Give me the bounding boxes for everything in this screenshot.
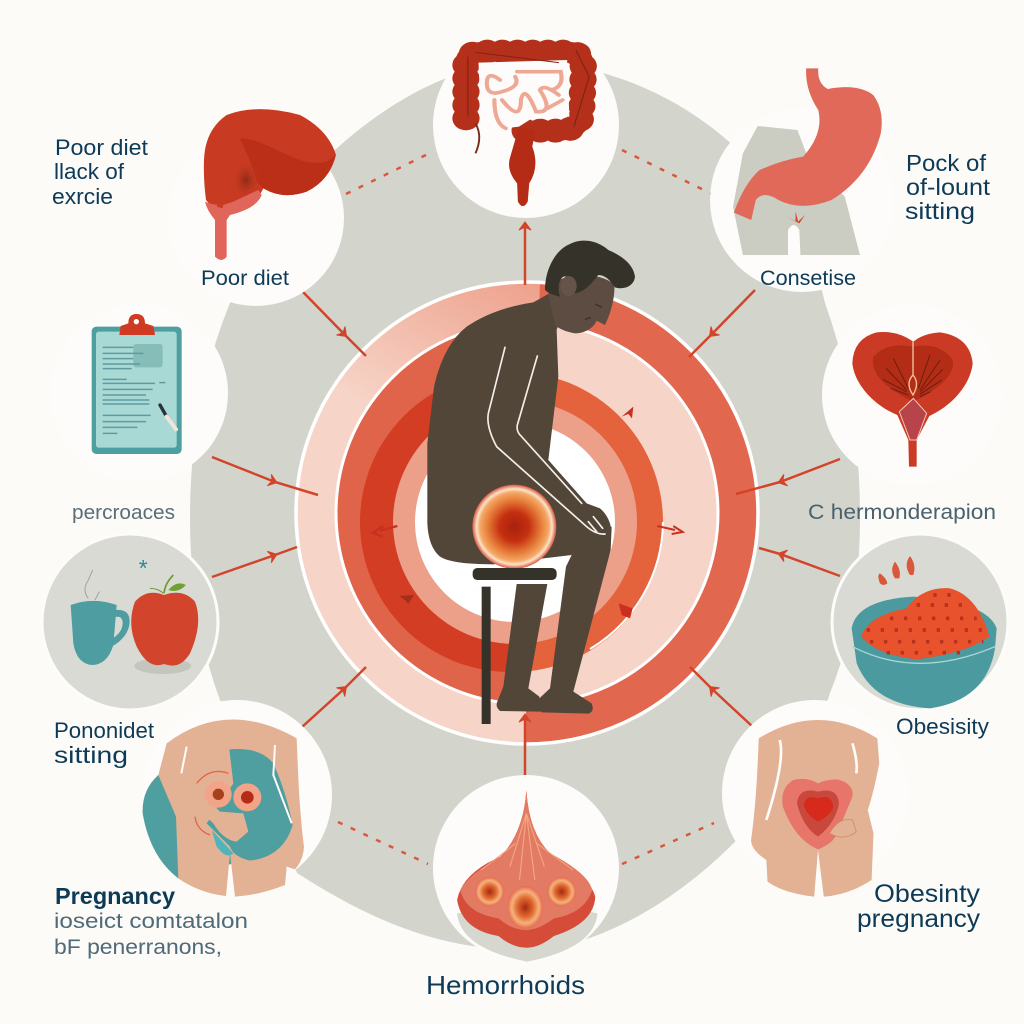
concentric rings xyxy=(296,282,758,744)
arrow: lower right xyxy=(759,548,840,576)
pain arrow xyxy=(622,407,633,418)
text: Obesinty pregnancy xyxy=(857,880,981,933)
face details xyxy=(585,304,602,319)
stool leg xyxy=(482,587,491,724)
pain arrow xyxy=(399,595,414,604)
arrow: left xyxy=(212,457,318,495)
torso and arm xyxy=(427,294,612,564)
back leg xyxy=(497,584,547,712)
inflamed area xyxy=(472,485,556,569)
text: Pononidet sitting: sitting xyxy=(54,742,128,768)
text: Pock of lount sitting xyxy=(905,150,991,224)
text: Pock of lount sitting: sitting xyxy=(905,198,975,224)
stool seat xyxy=(473,568,557,580)
text: Pock of lount sitting: of-lount xyxy=(906,174,991,200)
text: C hermonderapion: C hermonderapion xyxy=(808,501,996,524)
panel: hemorrhoid cross section xyxy=(433,775,619,962)
label: Poor diet: Poor diet xyxy=(201,266,289,290)
text: Obesinty pregnancy: pregnancy xyxy=(857,905,981,933)
text: Pononidet sitting xyxy=(54,718,154,768)
arrow: top xyxy=(524,224,526,285)
text: Poor diet lack of exercise: Poor diet xyxy=(55,135,148,160)
pain arrow xyxy=(373,526,397,537)
dashed connector bottom right xyxy=(622,823,714,864)
text: Pregnancy description: bF penerranons, xyxy=(54,936,222,959)
dashed connector bottom left xyxy=(338,822,428,864)
panel: mug and apple xyxy=(42,534,218,710)
text: Obesinty pregnancy: Obesinty xyxy=(874,880,981,908)
panel: lower body with swollen areas xyxy=(142,700,332,897)
pain arrow xyxy=(619,603,633,618)
front leg xyxy=(538,527,612,714)
arrow: top left xyxy=(303,292,366,356)
arrow: top right xyxy=(689,290,755,357)
panel: stomach top left xyxy=(168,109,344,306)
grey backdrop xyxy=(190,62,860,950)
text: percroaces: percroaces xyxy=(72,502,175,524)
head xyxy=(548,275,614,333)
panel: stomach top right xyxy=(710,68,894,292)
arrow: bottom xyxy=(524,716,526,775)
text: Poor diet lack of exercise: llack of xyxy=(54,159,125,184)
text: Obesisity: Obesisity xyxy=(896,714,989,739)
text: Pregnancy description: Pregnancy xyxy=(55,883,175,909)
panel: mug and apple: * xyxy=(139,555,148,581)
text: Pregnancy description xyxy=(54,883,248,959)
panel: colon xyxy=(433,32,619,218)
arrow: bottom right xyxy=(690,667,753,727)
arrow: bottom left xyxy=(302,667,366,727)
panel: bowl of food xyxy=(832,534,1008,710)
panel: heart shaped organ xyxy=(822,305,1002,485)
text: Pononidet sitting: Pononidet xyxy=(54,718,154,743)
text: Poor diet lack of exercise: exrcie xyxy=(52,184,113,209)
text: Pregnancy description: ioseict comtatalon xyxy=(54,910,248,933)
panel: clipboard xyxy=(50,304,228,482)
pain arrow xyxy=(657,526,683,534)
ear xyxy=(561,276,577,296)
label: Consetise: Consetise xyxy=(760,266,856,290)
seated man figure xyxy=(373,241,683,724)
dashed connector top right xyxy=(622,150,712,194)
hair xyxy=(545,241,635,297)
text: Poor diet lack of exercise xyxy=(52,135,148,209)
arrow: right xyxy=(736,459,840,494)
text: Hemorrhoids: Hemorrhoids xyxy=(426,970,585,1000)
text: Pock of lount sitting: Pock of xyxy=(906,150,987,176)
arrow: lower left xyxy=(212,547,297,577)
arm outline xyxy=(488,347,605,534)
panel: lower body with heart xyxy=(722,700,908,897)
dashed connector top left xyxy=(346,153,430,194)
